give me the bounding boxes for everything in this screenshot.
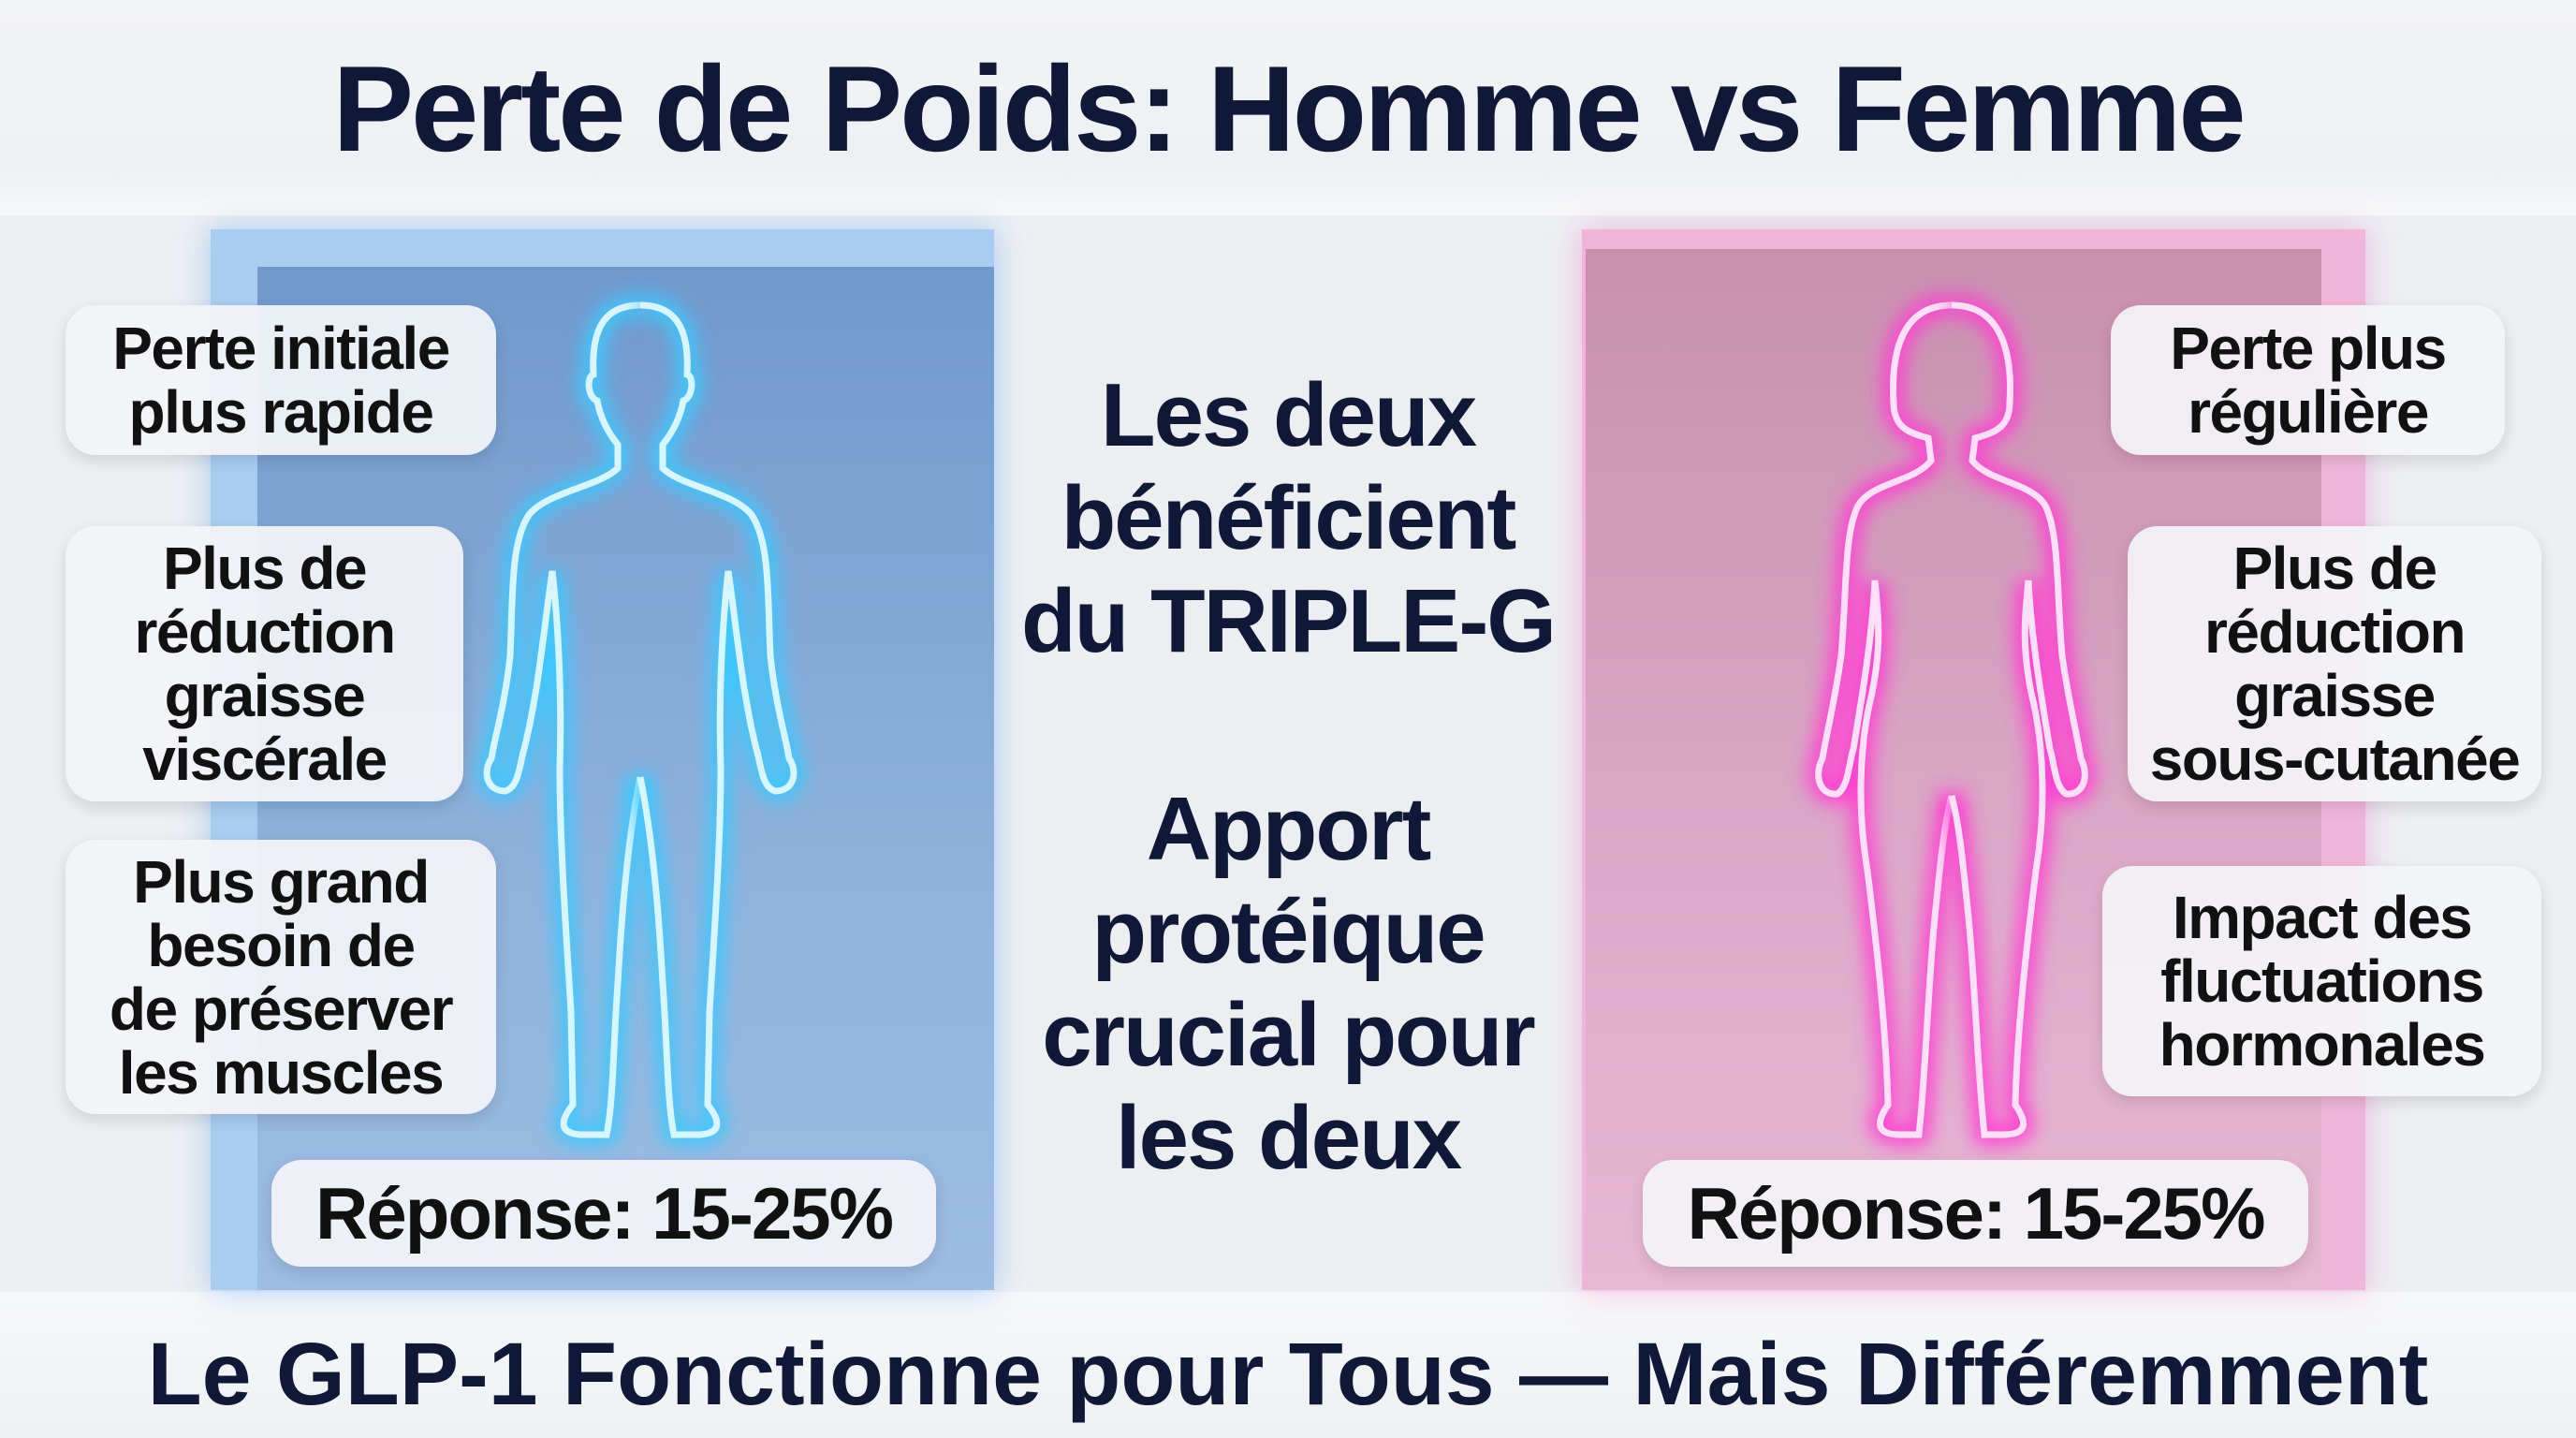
- text: réponse femme: [1643, 1160, 2308, 1267]
- text: perte régulière: [2111, 305, 2505, 455]
- center text: protéines: crucial pour: [1042, 985, 1534, 1085]
- center text: protéines: protéique: [1091, 882, 1485, 982]
- icon: female silhouette: [1819, 305, 2085, 1135]
- text: fluctuations hormonales: fluctuations: [2160, 947, 2483, 1015]
- text: perte initiale: plus rapide: [129, 378, 432, 446]
- text: réponse femme: Réponse: 15-25%: [1688, 1172, 2263, 1255]
- text: graisse viscérale: graisse: [165, 662, 364, 729]
- text: préserver muscles: de préserver: [110, 976, 452, 1043]
- title: Perte de Poids: Homme vs Femme: [332, 40, 2244, 177]
- text: préserver muscles: les muscles: [119, 1039, 443, 1107]
- text: graisse viscérale: Plus de: [163, 535, 366, 602]
- text: graisse sous-cutanée: graisse: [2234, 662, 2435, 729]
- panel: homme: [211, 229, 994, 1290]
- center text: triple-g: Les deux: [1101, 365, 1475, 465]
- text: graisse sous-cutanée: Plus de: [2232, 535, 2437, 602]
- text: graisse sous-cutanée: [2128, 526, 2541, 801]
- text: préserver muscles: Plus grand: [133, 848, 429, 916]
- text: graisse sous-cutanée: réduction: [2204, 598, 2465, 666]
- text: graisse sous-cutanée: sous-cutanée: [2150, 726, 2519, 793]
- text: perte régulière: régulière: [2188, 378, 2428, 446]
- center text: protéines: les deux: [1116, 1088, 1460, 1188]
- text: perte régulière: Perte plus: [2170, 315, 2446, 382]
- footer title: Le GLP-1 Fonctionne pour Tous — Mais Différemment: [148, 1325, 2428, 1424]
- text: fluctuations hormonales: Impact des: [2173, 884, 2471, 951]
- center text: triple-g: [1021, 365, 1555, 671]
- center text: protéines: [1042, 779, 1535, 1188]
- text: graisse viscérale: [66, 526, 463, 801]
- center text: triple-g: du TRIPLE-G: [1021, 571, 1555, 671]
- text: fluctuations hormonales: [2102, 866, 2541, 1096]
- text: perte initiale: Perte initiale: [112, 315, 449, 382]
- panel: femme: [1582, 229, 2365, 1290]
- text: fluctuations hormonales: hormonales: [2159, 1011, 2484, 1078]
- text: graisse viscérale: viscérale: [142, 726, 387, 793]
- icon: male silhouette: [487, 305, 794, 1135]
- text: perte initiale: [66, 305, 496, 455]
- text: graisse viscérale: réduction: [134, 598, 395, 666]
- text: préserver muscles: besoin de: [147, 912, 415, 979]
- center text: triple-g: bénéficient: [1061, 468, 1515, 568]
- text: réponse homme: Réponse: 15-25%: [315, 1172, 892, 1255]
- text: préserver muscles: [66, 840, 496, 1114]
- center text: protéines: Apport: [1147, 779, 1429, 879]
- text: réponse homme: [271, 1160, 936, 1267]
